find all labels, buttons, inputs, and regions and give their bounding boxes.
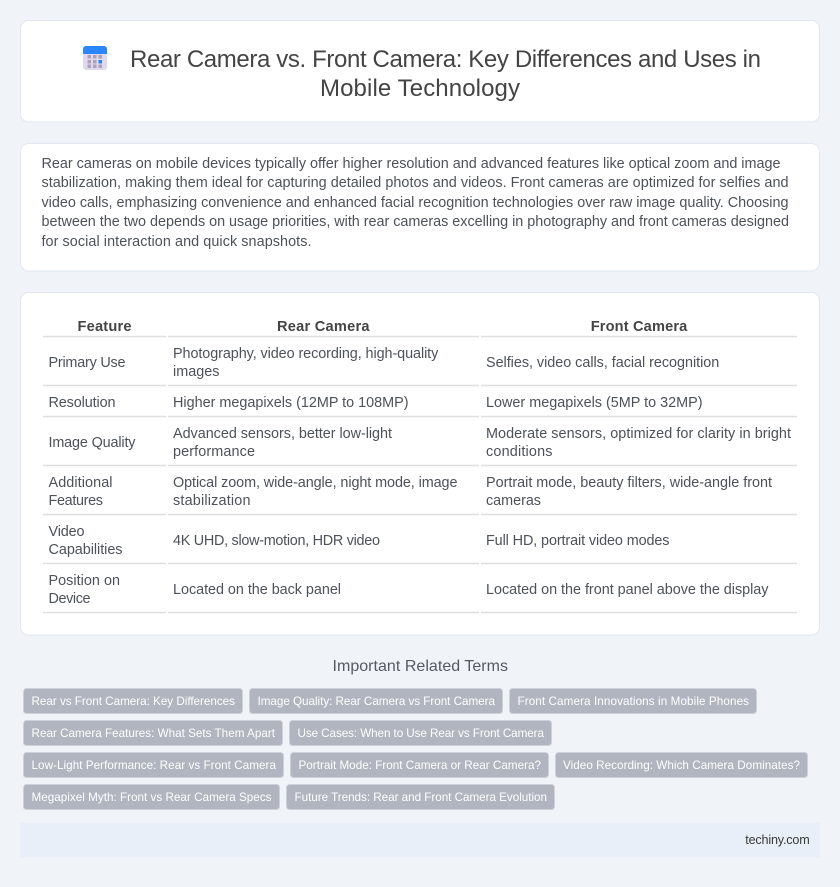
row: video capabilities: Full HD, portrait video modes [486, 533, 670, 549]
icon: calendar [83, 46, 107, 70]
row: resolution: Higher megapixels (12MP to 108MP) [173, 395, 408, 411]
row: position on device: Located on the back panel [173, 582, 341, 598]
row: primary use: Photography, video recording, high-quality [173, 346, 439, 362]
tag row 2: Use Cases: When to Use Rear vs Front Camera [298, 727, 544, 740]
row: resolution: Resolution [48, 395, 116, 411]
panel: summary paragraph: video calls, emphasizing convenience and enhanced facial recognition technologies over raw image quality. Choosing [42, 195, 788, 211]
tag row 2: Rear Camera Features: What Sets Them Apart [32, 727, 276, 740]
row: primary use: Selfies, video calls, facial recognition [486, 355, 719, 371]
row: position on device: Position on [48, 573, 120, 589]
related term tags [24, 688, 808, 810]
row: resolution [48, 395, 702, 411]
heading: important related terms: Important Related Terms [332, 658, 508, 675]
row: position on device [48, 573, 769, 607]
tag row 3: Low-Light Performance: Rear vs Front Camera [32, 759, 276, 772]
row: image quality: Advanced sensors, better low-light [173, 426, 392, 442]
panel: summary paragraph: for social interaction and quick snapshots. [42, 234, 312, 250]
row: position on device: Device [48, 591, 90, 607]
tag row 1: Front Camera Innovations in Mobile Phones [518, 695, 749, 708]
tag row 3: Portrait Mode: Front Camera or Rear Camera? [298, 759, 541, 772]
row: resolution: Lower megapixels (5MP to 32MP) [486, 395, 702, 411]
panel: summary paragraph: Rear cameras on mobile devices typically offer higher resolution and advanced features like optical zoom and image [42, 156, 780, 172]
row: image quality: Image Quality [48, 435, 136, 451]
row: additional features: cameras [486, 493, 541, 509]
tag row 4: Megapixel Myth: Front vs Rear Camera Specs [32, 791, 272, 804]
tag row 4: Future Trends: Rear and Front Camera Evolution [294, 791, 547, 804]
tag row 4 [24, 784, 554, 810]
table header row: Feature [78, 319, 132, 335]
footer: techiny.com [745, 833, 810, 847]
row: primary use [48, 346, 719, 380]
panel: header [20, 20, 820, 122]
panel: comparison table [20, 292, 820, 635]
panel: summary paragraph: stabilization, making them ideal for capturing detailed photos and videos. Front cameras are optimized for selfies and [42, 175, 788, 191]
footer [20, 823, 820, 857]
row: video capabilities: Capabilities [48, 542, 122, 558]
row: video capabilities [48, 524, 670, 558]
title [130, 46, 761, 102]
table header row [78, 319, 688, 335]
row: additional features: Features [48, 493, 103, 509]
tag row 3: Video Recording: Which Camera Dominates? [563, 759, 800, 772]
row: image quality: Moderate sensors, optimized for clarity in bright [486, 426, 791, 442]
row: additional features: Portrait mode, beauty filters, wide-angle front [486, 475, 772, 491]
tag row 1 [24, 688, 756, 714]
tag row 3 [24, 752, 808, 778]
tag row 2 [24, 720, 552, 746]
row: image quality: performance [173, 444, 255, 460]
row: image quality [48, 426, 791, 460]
row: position on device: Located on the front panel above the display [486, 582, 769, 598]
title: Rear Camera vs. Front Camera: Key Differences and Uses in [130, 46, 761, 73]
row: additional features: stabilization [173, 493, 250, 509]
row: video capabilities: 4K UHD, slow-motion, HDR video [173, 533, 380, 549]
table header row: Rear Camera [277, 319, 370, 335]
row: additional features: Optical zoom, wide-angle, night mode, image [173, 475, 458, 491]
table header row: Front Camera [591, 319, 688, 335]
panel: summary paragraph [20, 144, 820, 271]
row: primary use: images [173, 364, 220, 380]
row: video capabilities: Video [48, 524, 84, 540]
title: Mobile Technology [320, 75, 520, 102]
row: primary use: Primary Use [48, 355, 126, 371]
tag row 1: Rear vs Front Camera: Key Differences [32, 695, 235, 708]
row: additional features [48, 475, 772, 509]
tag row 1: Image Quality: Rear Camera vs Front Camera [258, 695, 495, 708]
panel: summary paragraph: between the two depends on usage priorities, with rear cameras excelling in photography and front cameras designed [42, 214, 789, 230]
row: additional features: Additional [48, 475, 112, 491]
row: image quality: conditions [486, 444, 552, 460]
